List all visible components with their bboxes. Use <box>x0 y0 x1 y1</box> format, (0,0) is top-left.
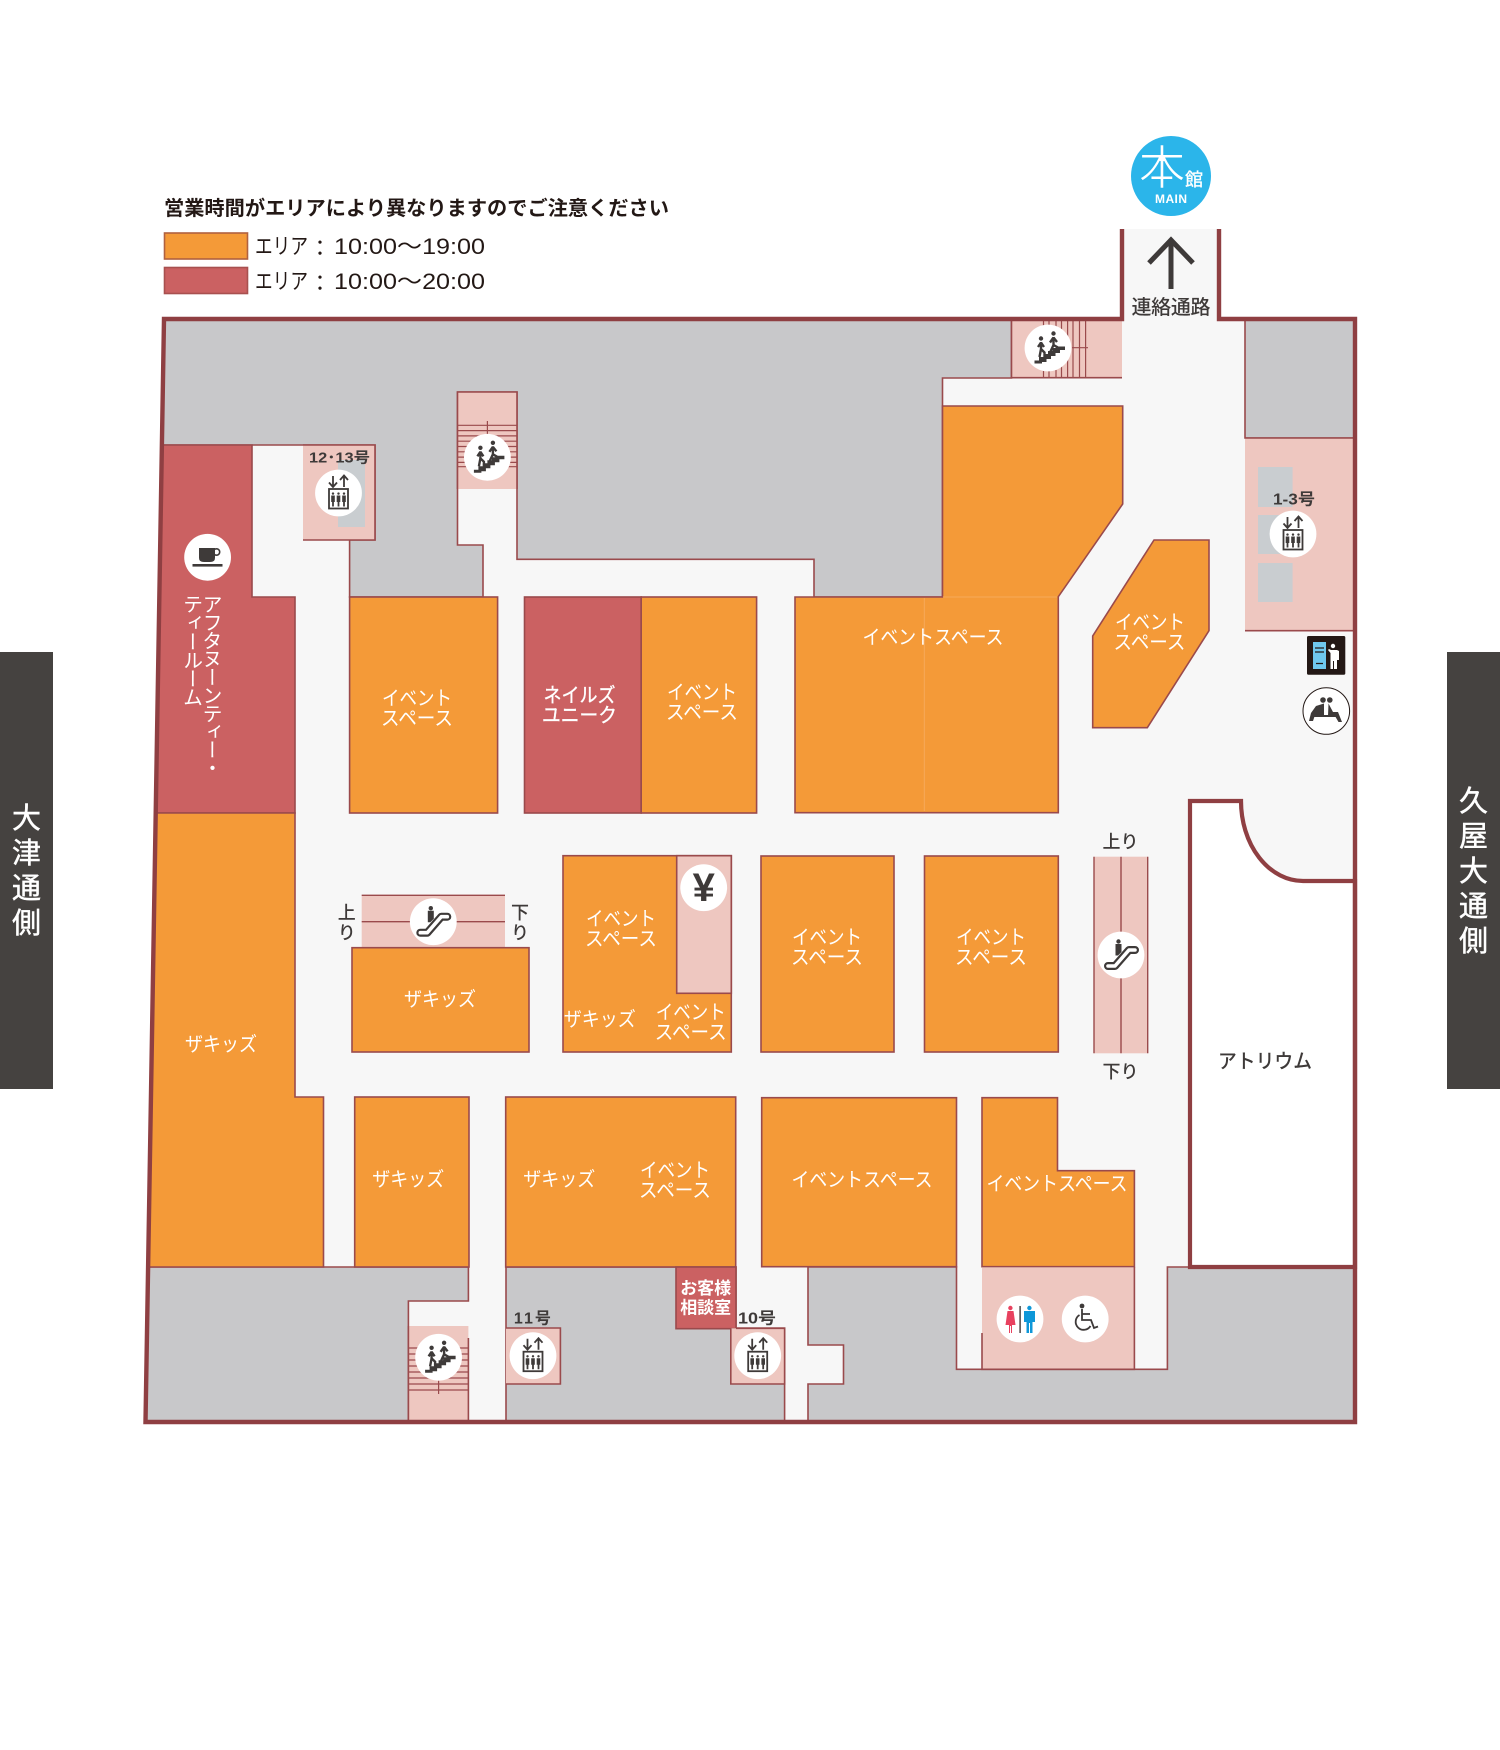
icon: stairs lower left <box>415 1334 462 1381</box>
shop: event space B: スペース <box>666 702 738 724</box>
staircase top right <box>1012 321 1122 378</box>
shop: event space A: イベント <box>382 688 452 710</box>
legend: opening hours: 10:00〜19:00 <box>334 234 485 259</box>
shop: event space with ATM <box>563 856 731 1052</box>
legend: opening hours: エリア <box>255 234 308 259</box>
legend: opening hours: エリア <box>255 269 308 294</box>
shop: Nails Unique <box>524 597 641 813</box>
shop: event space hexagon: スペース <box>1114 632 1186 654</box>
shop: event space D <box>924 856 1058 1052</box>
staircase upper left <box>458 392 517 489</box>
shop: event space B: イベント <box>667 682 737 704</box>
shop: The Kids centre: ザキッズ <box>404 988 476 1011</box>
icon: elevator 10 <box>734 1332 781 1379</box>
icon: escalator left <box>410 898 457 945</box>
shop: Nails Unique: ネイルズ <box>544 684 616 707</box>
customer consultation room: 相談室 <box>680 1298 731 1317</box>
escalator right <box>1094 832 1148 1082</box>
icon: stairs upper left <box>464 434 511 481</box>
atrium: アトリウム <box>1218 1051 1312 1073</box>
elevator lobby 12-13 <box>303 445 375 540</box>
shop: The Kids lower <box>355 1097 469 1267</box>
icon: elevator 1-3 <box>1270 511 1316 557</box>
icon: main building badge: 館 <box>1185 170 1203 190</box>
side label: Hisaya-odori side: 通 <box>1459 891 1488 923</box>
shop: The Kids centre <box>352 948 529 1052</box>
shop: event space with ATM: スペース <box>655 1022 727 1044</box>
legend: opening hours: ： <box>309 236 331 261</box>
shop: event space hexagon: イベント <box>1115 612 1185 634</box>
escalator left: り <box>511 923 529 943</box>
arrow: to main building: 連絡通路 <box>1132 296 1210 319</box>
shop: event space with ATM: イベント <box>586 908 656 930</box>
shop: event space with ATM: ザキッズ <box>564 1008 636 1031</box>
legend: opening hours: 営業時間がエリアにより異なりますのでご注意ください <box>164 196 669 220</box>
shop: The Kids large left: ザキッズ <box>185 1033 257 1056</box>
icon: ATM yen <box>680 864 727 911</box>
escalator left: り <box>338 923 356 943</box>
legend: opening hours: ： <box>309 271 331 296</box>
side label: Otsu-dori side <box>0 652 53 1089</box>
icon: stairs top right <box>1025 325 1071 371</box>
side label: Hisaya-odori side: 大 <box>1459 855 1488 888</box>
icon: ticket machine <box>1307 636 1345 675</box>
shop: event space C <box>761 856 894 1052</box>
shop: Afternoon Tea Room: ティールーム <box>180 594 202 706</box>
side label: Hisaya-odori side: 側 <box>1459 925 1488 958</box>
shop: The Kids and event space lower: スペース <box>639 1180 711 1202</box>
arrow: to main building <box>1132 240 1210 319</box>
shop: event space C: イベント <box>792 927 862 949</box>
outer walls <box>146 229 1355 1422</box>
shop: event space F: イベントスペース <box>986 1174 1128 1196</box>
shop: The Kids large left <box>148 813 324 1267</box>
shop: Afternoon Tea Room: アフタヌーンティー・ <box>199 594 221 776</box>
elevator lobby 12-13: 12･13号 <box>309 450 370 467</box>
icon: main building badge: 本 <box>1138 142 1186 194</box>
icon: escalator right <box>1098 932 1144 978</box>
shop: event space with ATM: イベント <box>656 1002 726 1024</box>
shop: event space D: イベント <box>956 927 1026 949</box>
icon: cafe cup <box>184 534 231 581</box>
shop: event space E <box>762 1098 956 1267</box>
side label: Otsu-dori side: 側 <box>12 907 41 940</box>
shop: event space large top: イベントスペース <box>862 627 1004 649</box>
shop: event space A: スペース <box>381 708 453 730</box>
icon: restrooms <box>997 1296 1043 1342</box>
shop: Afternoon Tea Room <box>156 445 295 813</box>
shop: event space B <box>641 597 757 813</box>
icon: seating area <box>1303 688 1350 734</box>
icon: accessible restroom <box>1062 1296 1109 1342</box>
icon: main building badge <box>1131 136 1211 216</box>
shop: event space E: イベントスペース <box>792 1170 932 1192</box>
icon: ATM yen: ¥ <box>693 866 716 910</box>
escalator left <box>338 895 529 948</box>
side label: Otsu-dori side: 大 <box>12 802 41 835</box>
shop: event space hexagon <box>1093 540 1209 728</box>
atrium <box>1190 801 1355 1267</box>
shop: The Kids and event space lower: ザキッズ <box>523 1168 595 1191</box>
escalator left: 上 <box>338 903 356 923</box>
side label: Otsu-dori side: 津 <box>12 838 41 870</box>
shop: The Kids and event space lower: イベント <box>640 1160 710 1182</box>
side label: Hisaya-odori side <box>1447 652 1500 1089</box>
shop: event space D: スペース <box>955 947 1027 969</box>
elevator lobby 1-3 <box>1245 438 1355 631</box>
elevator lobby 11 <box>506 1309 560 1384</box>
elevator lobby 10: 10号 <box>738 1309 776 1327</box>
escalator right: 上り <box>1102 832 1138 852</box>
icon: elevator 11 <box>510 1332 556 1379</box>
legend: opening hours <box>164 196 669 296</box>
elevator lobby 1-3: 1-3号 <box>1273 491 1315 509</box>
shop: event space C: スペース <box>791 947 863 969</box>
legend: opening hours: 10:00〜20:00 <box>334 269 485 294</box>
shop: Nails Unique: ユニーク <box>542 704 617 727</box>
floor plan base <box>146 229 1355 1422</box>
shop: event space A <box>350 597 498 813</box>
restrooms area <box>982 1267 1134 1369</box>
shop: event space with ATM: スペース <box>585 928 657 950</box>
back-of-house grey zones <box>146 319 1355 1422</box>
icon: main building badge: MAIN <box>1155 192 1187 206</box>
side label: Hisaya-odori side: 久 <box>1459 785 1488 818</box>
elevator lobby 10 <box>731 1309 785 1384</box>
icon: elevator 12-13 <box>315 470 362 516</box>
shop: event space large top <box>795 406 1123 813</box>
customer consultation room: お客様 <box>680 1278 731 1298</box>
elevator lobby 11: 11号 <box>514 1309 551 1327</box>
staircase lower left <box>408 1326 468 1421</box>
shop: event space F <box>982 1098 1134 1267</box>
shop: The Kids and event space lower <box>506 1097 736 1267</box>
escalator left: 下 <box>511 903 529 923</box>
side label: Otsu-dori side: 通 <box>12 873 41 905</box>
shop: The Kids lower: ザキッズ <box>372 1168 444 1191</box>
side label: Hisaya-odori side: 屋 <box>1459 821 1488 853</box>
customer consultation room <box>676 1267 736 1329</box>
escalator right: 下り <box>1102 1062 1138 1082</box>
